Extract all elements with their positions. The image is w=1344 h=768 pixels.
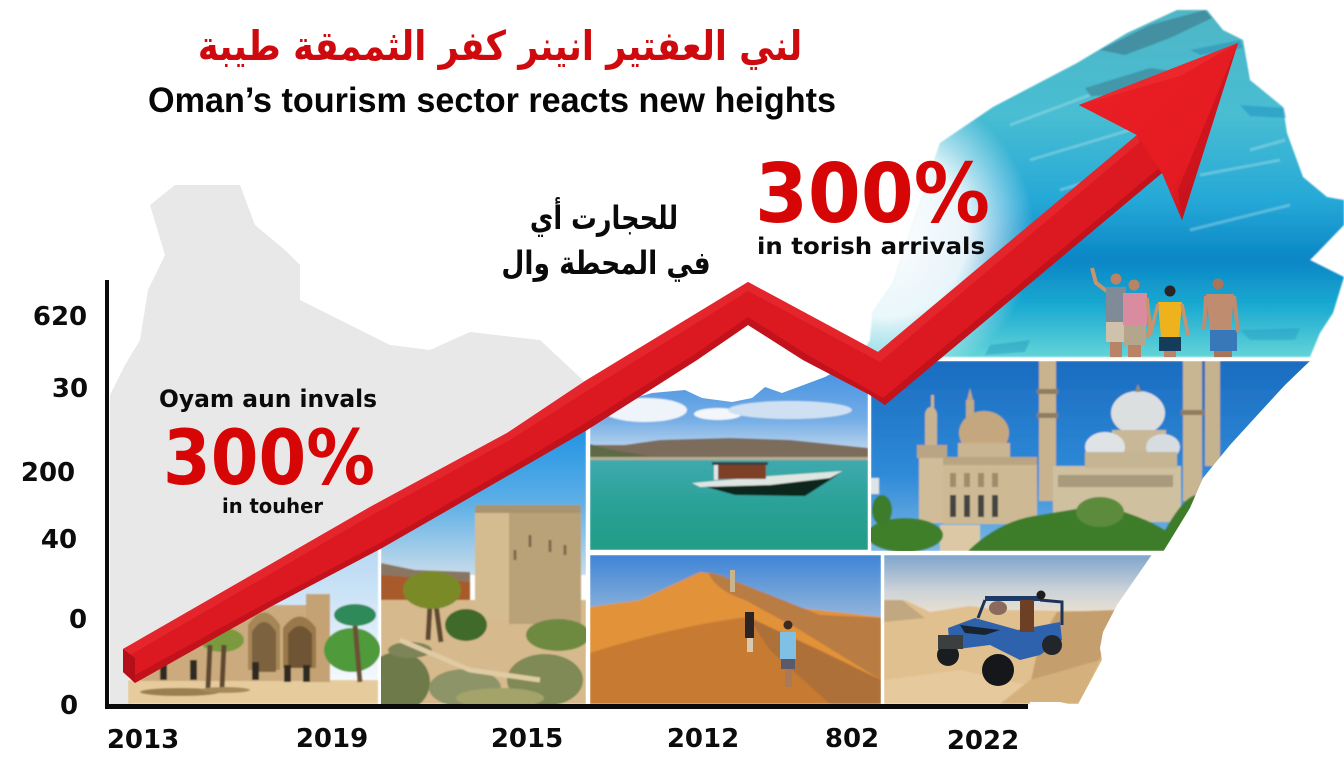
torn white map edge beside buggy — [1028, 553, 1344, 712]
x-axis labels: 2019 — [296, 724, 368, 754]
x-axis labels: 2022 — [947, 726, 1019, 756]
text block: centre Arabic caption — [501, 197, 711, 283]
y-axis labels: 40 — [41, 525, 77, 555]
text block: centre Arabic caption: للحجارت أي — [530, 197, 678, 237]
x-axis labels: 2013 — [107, 725, 179, 755]
title: English subtitle: Oman’s tourism sector reacts new heights — [148, 81, 836, 120]
tourist group — [1092, 268, 1238, 357]
panel: mosque photo — [867, 361, 1311, 552]
grey map of Oman background — [110, 185, 585, 704]
callout: 300% tourist arrivals: 300% — [755, 147, 990, 242]
y-axis labels: 200 — [21, 458, 75, 488]
callout: 300% left panel — [159, 385, 377, 518]
x-axis labels: 2012 — [667, 724, 739, 754]
text block: centre Arabic caption: في المحطة وال — [501, 245, 711, 283]
y-axis labels — [21, 302, 88, 721]
x-axis labels: 2015 — [491, 724, 563, 754]
y-axis labels: 0 — [69, 605, 87, 635]
boat — [692, 462, 843, 496]
panel: orange dunes photo — [590, 555, 881, 704]
chart axes — [105, 280, 1028, 709]
callout: 300% left panel: Oyam aun invals — [159, 385, 377, 413]
red growth arrow — [123, 43, 1238, 683]
y-axis labels: 30 — [52, 374, 88, 404]
callout: 300% tourist arrivals: in torish arrivals — [757, 234, 985, 260]
y-axis labels: 0 — [60, 691, 78, 721]
panel: desert fort photo — [128, 550, 380, 704]
x-axis labels: 802 — [825, 724, 879, 754]
torn white map edge above boat photo — [588, 358, 860, 428]
panel: boat on turquoise sea photo — [590, 360, 868, 550]
panel: dune buggy photo — [884, 555, 1156, 704]
hikers on dune — [730, 570, 796, 687]
x-axis labels — [107, 724, 1019, 756]
callout: 300% left panel: 300% — [163, 413, 375, 502]
panel: ocean with tourists — [860, 10, 1344, 357]
title: Arabic heading: لني العفتير انينر كفر الثممقة طيبة — [198, 22, 802, 70]
y-axis labels: 620 — [33, 302, 87, 332]
blue buggy — [937, 590, 1062, 686]
panel: stone tower photo — [381, 430, 586, 704]
callout: 300% left panel: in touher — [222, 494, 323, 518]
torn white map edge beside mosque — [1163, 359, 1344, 552]
